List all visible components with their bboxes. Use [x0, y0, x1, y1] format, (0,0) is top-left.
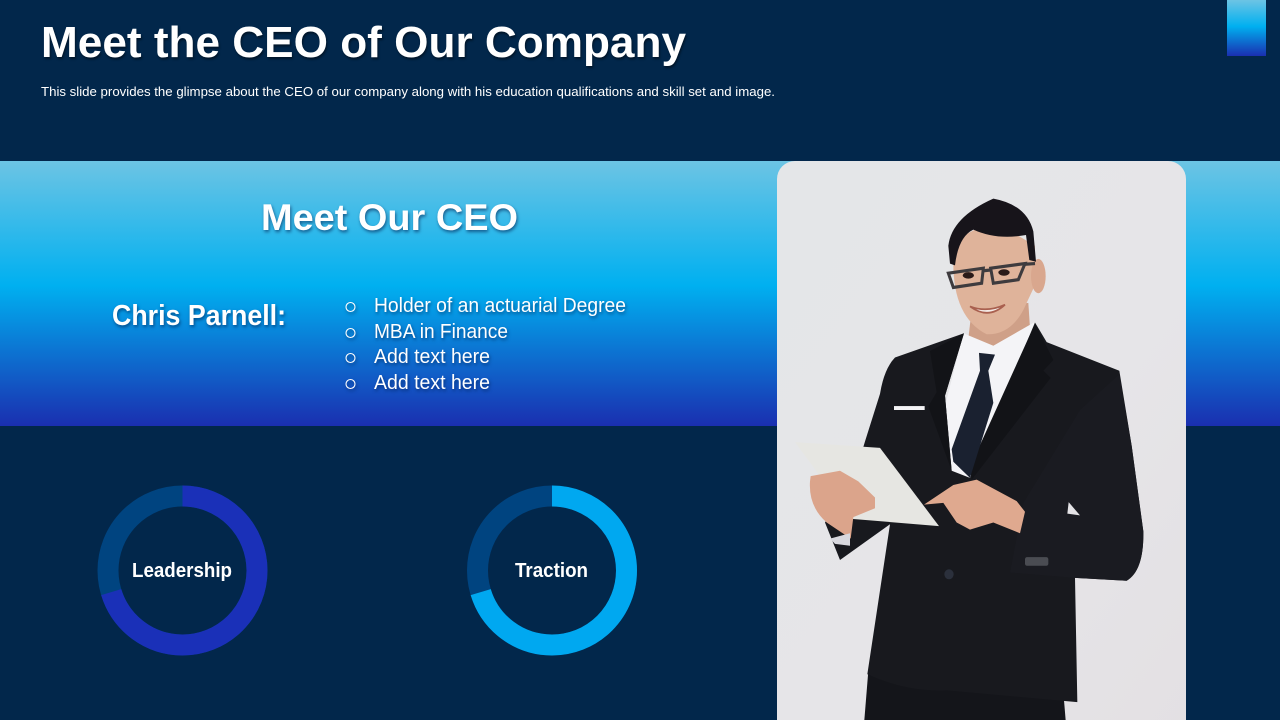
tie	[952, 353, 995, 478]
cuff buttons	[1025, 557, 1048, 566]
slide title: Meet the CEO of Our Company	[41, 18, 687, 67]
corner accent block	[1227, 0, 1266, 56]
qualification 3: Add text here	[374, 346, 490, 368]
jacket sleeve shading	[1075, 410, 1144, 581]
neck	[968, 302, 1030, 346]
head	[953, 221, 1035, 334]
qualification 4: Add text here	[374, 372, 490, 394]
pocket square	[894, 406, 925, 410]
qualification 2: MBA in Finance	[374, 321, 508, 343]
CEO portrait photo panel	[777, 161, 1186, 720]
CEO name: Chris Parnell:	[112, 300, 286, 332]
left lapel	[945, 333, 964, 470]
qualifications list	[346, 295, 626, 394]
leadership label: Leadership	[132, 560, 232, 582]
holding hand	[810, 471, 875, 539]
eyes	[963, 269, 1010, 279]
hair	[948, 199, 1036, 265]
tablet	[852, 446, 939, 526]
shirt	[944, 322, 1038, 481]
jacket	[825, 322, 1143, 702]
glasses	[948, 264, 1035, 287]
qualification 1: Holder of an actuarial Degree	[374, 295, 626, 317]
gradient banner	[0, 161, 1280, 426]
ear	[1031, 259, 1046, 293]
banner heading: Meet Our CEO	[261, 197, 518, 238]
trousers	[864, 671, 1066, 720]
traction label: Traction	[515, 560, 588, 582]
smile	[970, 305, 1005, 313]
donut chart: leadership	[108, 496, 257, 645]
pointing hand	[924, 480, 1025, 533]
subtitle: This slide provides the glimpse about the CEO of our company along with his education qualifications and skill set and image.	[41, 85, 775, 99]
button	[944, 569, 954, 579]
donut chart: traction	[478, 496, 626, 645]
right lapel	[971, 329, 1032, 476]
gap between arm and body	[1067, 502, 1080, 515]
shirt cuff	[830, 533, 850, 546]
illustration of man in suit holding a tablet	[795, 199, 1143, 720]
